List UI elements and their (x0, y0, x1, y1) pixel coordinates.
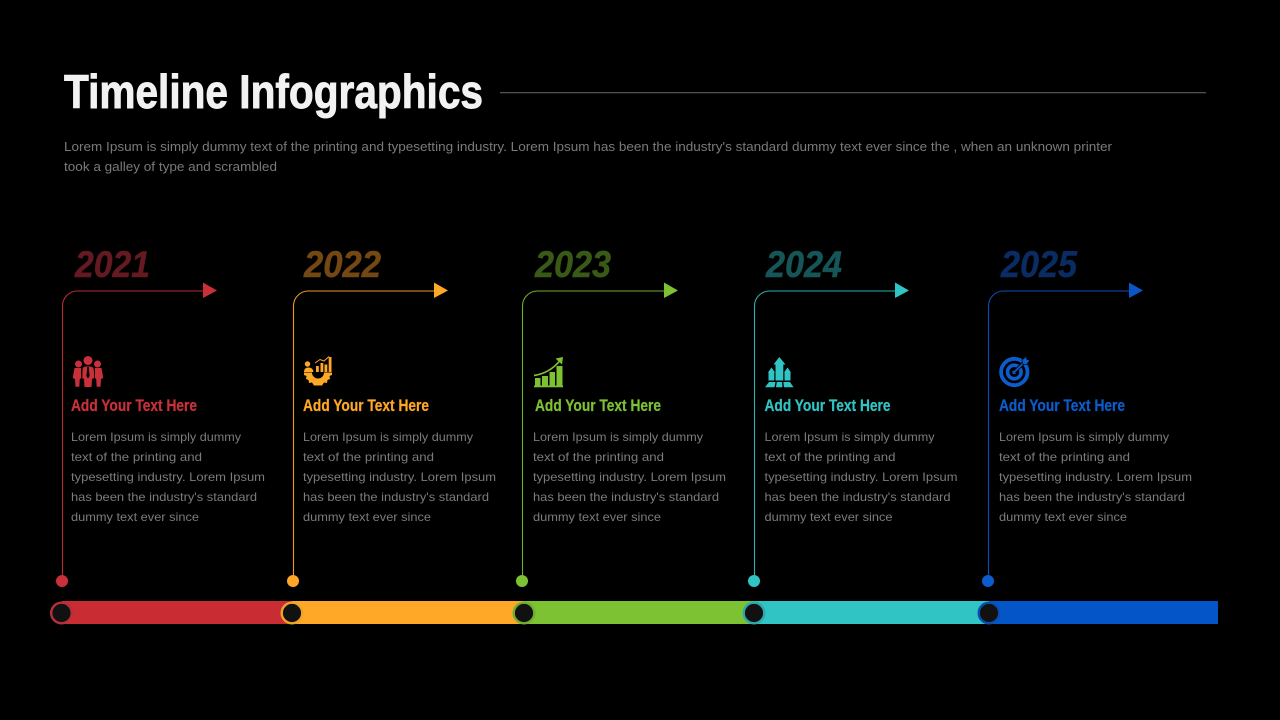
arrow 2025 (988, 282, 1143, 575)
body text (999, 430, 1192, 524)
body text: has been the industry's standard (303, 490, 489, 504)
body text: dummy text ever since (533, 510, 661, 524)
body text: has been the industry's standard (533, 490, 719, 504)
body text: text of the printing and (764, 450, 896, 464)
body text (71, 430, 265, 524)
title: Timeline Infographics (64, 65, 483, 118)
body text: has been the industry's standard (71, 490, 257, 504)
body text: dummy text ever since (303, 510, 431, 524)
year 2024: 2024 (765, 243, 842, 285)
panel: 2024 (748, 243, 958, 587)
body text: typesetting industry. Lorem Ipsum (764, 470, 958, 484)
body text (303, 430, 496, 524)
heading: Add Your Text Here (303, 397, 429, 415)
year 2023: 2023 (534, 243, 611, 285)
marker dot (982, 575, 994, 587)
body text: text of the printing and (999, 450, 1130, 464)
intro text: Lorem Ipsum is simply dummy text of the printing and typesetting industry. Lorem Ipsum has been the industry's standard dummy text ever since the , when an unknown printer (64, 139, 1113, 154)
panel: 2022 (287, 243, 496, 587)
arrow 2024 (754, 282, 909, 575)
body text: Lorem Ipsum is simply dummy (533, 430, 703, 444)
arrow 2022 (294, 282, 448, 575)
body text: text of the printing and (303, 450, 434, 464)
body text: typesetting industry. Lorem Ipsum (71, 470, 265, 484)
arrow 2023 (522, 282, 678, 575)
body text: dummy text ever since (71, 510, 199, 524)
heading: Add Your Text Here (535, 397, 661, 415)
intro text: took a galley of type and scrambled (64, 159, 277, 174)
body text: dummy text ever since (764, 510, 893, 524)
body text: Lorem Ipsum is simply dummy (764, 430, 934, 444)
body text: text of the printing and (71, 450, 202, 464)
intro text (64, 139, 1113, 174)
body text: Lorem Ipsum is simply dummy (999, 430, 1169, 444)
year 2025: 2025 (1000, 243, 1078, 285)
icon: rising arrows (765, 357, 794, 387)
panel: 2023 (516, 243, 726, 587)
panel: 2021 (56, 243, 265, 587)
heading: Add Your Text Here (71, 397, 197, 415)
panel: 2025 (982, 243, 1192, 587)
body text: has been the industry's standard (764, 490, 950, 504)
marker dot (748, 575, 760, 587)
icon: target (1001, 356, 1030, 385)
body text (764, 430, 958, 524)
timeline node 2021 (51, 603, 72, 623)
body text: typesetting industry. Lorem Ipsum (533, 470, 726, 484)
arrow 2021 (62, 282, 217, 575)
timeline bar (51, 601, 1218, 624)
icon: team (73, 356, 103, 387)
body text: typesetting industry. Lorem Ipsum (303, 470, 496, 484)
body text (533, 430, 726, 524)
heading: Add Your Text Here (999, 397, 1125, 415)
timeline node 2025 (979, 603, 999, 623)
marker dot (516, 575, 528, 587)
body text: typesetting industry. Lorem Ipsum (999, 470, 1192, 484)
timeline node 2024 (744, 603, 764, 623)
year 2021: 2021 (74, 243, 150, 285)
heading: Add Your Text Here (764, 397, 890, 415)
body text: Lorem Ipsum is simply dummy (71, 430, 241, 444)
body text: dummy text ever since (999, 510, 1127, 524)
body text: has been the industry's standard (999, 490, 1185, 504)
body text: text of the printing and (533, 450, 664, 464)
marker dot (287, 575, 299, 587)
timeline node 2022 (282, 603, 302, 623)
body text: Lorem Ipsum is simply dummy (303, 430, 473, 444)
year 2022: 2022 (303, 243, 381, 285)
marker dot (56, 575, 68, 587)
timeline node 2023 (514, 603, 534, 623)
icon: gear with chart (304, 356, 332, 386)
icon: growth chart (534, 357, 563, 387)
